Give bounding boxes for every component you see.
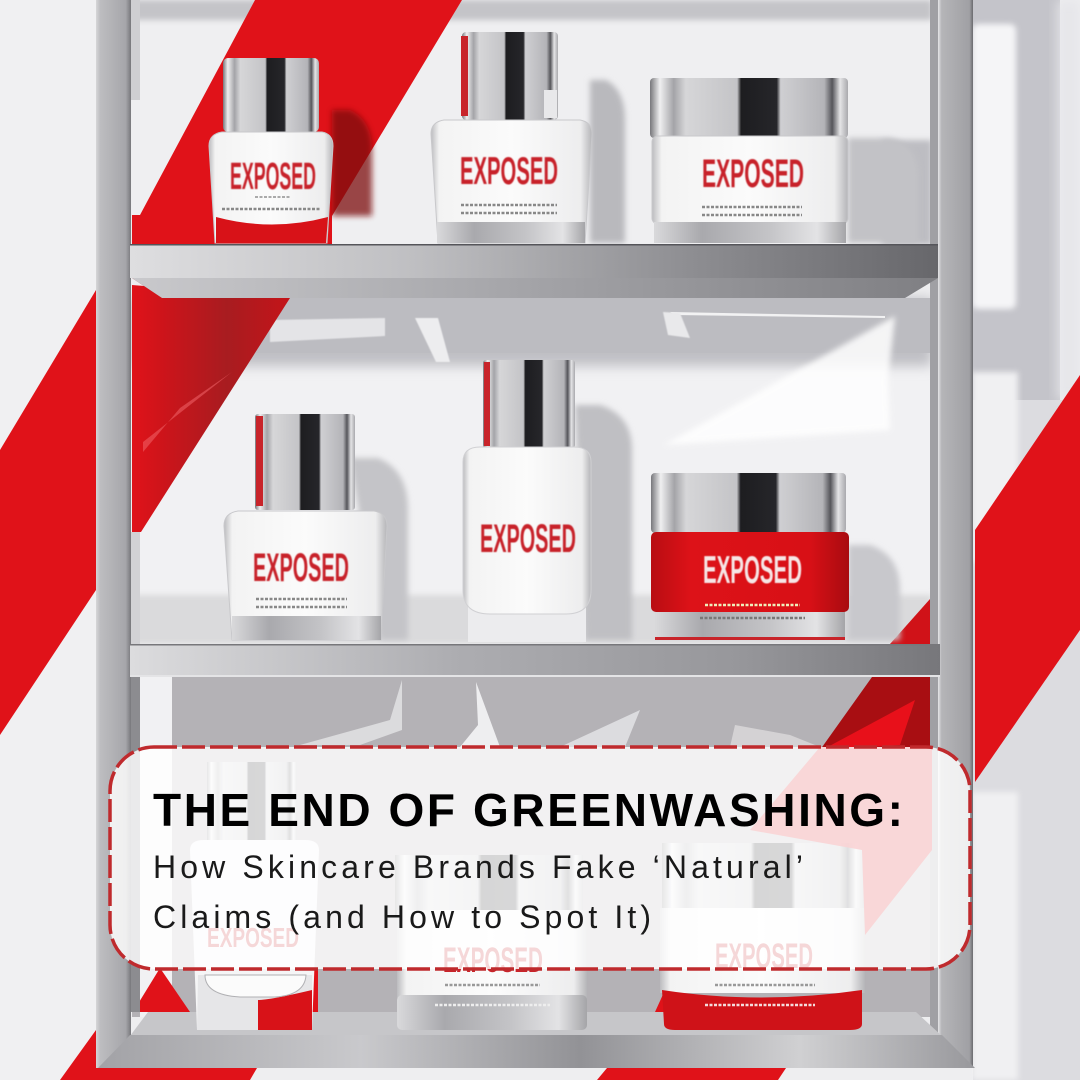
product: tall bottle middle bbox=[463, 360, 591, 642]
bottom shelf bbox=[98, 1012, 975, 1068]
red panels behind shelves bbox=[132, 0, 938, 1012]
product: red jar middle right bbox=[651, 473, 849, 640]
product: jar top right bbox=[650, 78, 848, 243]
product: small bottle top left bbox=[209, 58, 333, 243]
heading: THE END OF GREENWASHING: bbox=[153, 784, 903, 836]
label: EXPOSED bbox=[460, 150, 558, 193]
veiled red shard bbox=[750, 747, 932, 935]
subheading: How Skincare Brands Fake ‘Natural’ bbox=[153, 849, 803, 885]
product shadows bbox=[318, 80, 918, 640]
product: red-based jar bottom right bbox=[660, 843, 865, 1030]
label: EXPOSED bbox=[443, 941, 543, 980]
reflection shards bbox=[664, 316, 895, 445]
product: small bottle top left: EXPOSED bbox=[230, 156, 316, 198]
middle shelf bbox=[130, 644, 940, 677]
title panel bbox=[110, 747, 970, 969]
label: EXPOSED bbox=[702, 152, 804, 196]
top shelf bbox=[130, 244, 938, 298]
label: EXPOSED bbox=[207, 922, 299, 953]
product: bottle middle left bbox=[224, 414, 387, 640]
product: tall bottle middle: EXPOSED bbox=[480, 517, 576, 561]
bay backgrounds bbox=[132, 0, 932, 1017]
label: EXPOSED bbox=[703, 549, 802, 592]
product: bottle bottom left bbox=[190, 762, 319, 1030]
light streak on red bbox=[143, 372, 232, 452]
subheading bbox=[153, 849, 803, 935]
product: bottle middle left: EXPOSED bbox=[253, 546, 349, 590]
product: jar bottom centre bbox=[395, 855, 587, 1030]
label: EXPOSED bbox=[715, 937, 813, 976]
subheading: Claims (and How to Spot It) bbox=[153, 899, 651, 935]
product: bottle top centre bbox=[431, 32, 592, 243]
red diagonal stripes bbox=[0, 290, 1080, 1080]
